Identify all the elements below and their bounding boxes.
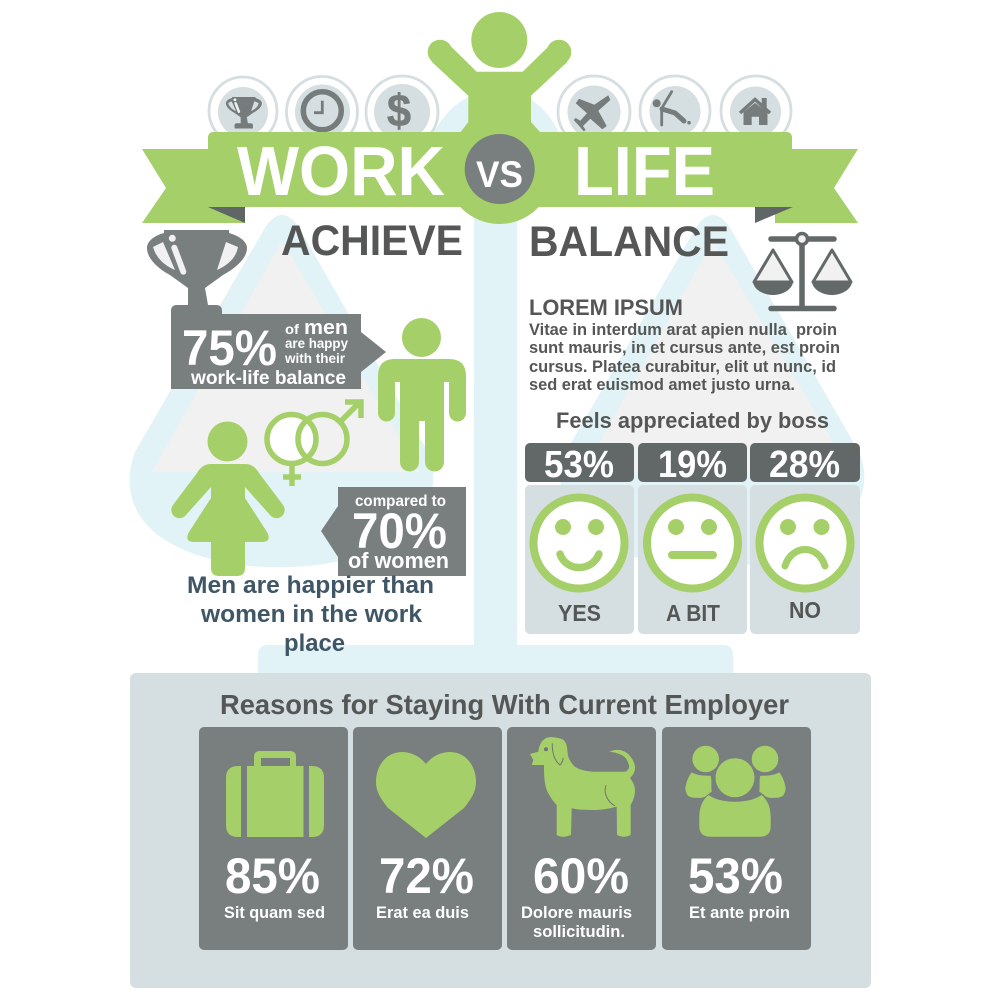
card: people 53%: [662, 727, 811, 950]
card: heart 72%: 72%: [379, 848, 474, 904]
panel: a bit: A BIT: [666, 600, 720, 626]
card: dog 60%: [507, 727, 656, 950]
figure with raised arms: [428, 12, 571, 224]
card: briefcase 85%: 85%: [225, 848, 320, 904]
text: men are happier: [187, 572, 434, 657]
heading: feels appreciated by boss: Feels appreciated by boss: [556, 408, 829, 433]
icon: trophy badge: [209, 77, 277, 145]
text: men are happier: Men are happier than: [187, 572, 434, 599]
callout: 75% of men: work-life balance: [190, 368, 346, 389]
icon: clock badge: [286, 76, 358, 148]
text block: lorem ipsum: LOREM IPSUM: [529, 295, 683, 320]
text block: lorem ipsum: cursus. Platea curabitur, elit ut nunc, id: [529, 358, 836, 376]
icon: dollar badge: [366, 76, 438, 148]
icon: gender symbols: [267, 402, 361, 486]
card: dog 60%: sollicitudin.: [533, 923, 625, 941]
callout: 70% of women: of women: [348, 548, 449, 573]
icon: large trophy: [147, 230, 247, 320]
icon: house badge: [721, 76, 791, 146]
icon row: work and life badges: [209, 76, 791, 148]
heading: reasons: Reasons for Staying With Current Employer: [220, 689, 789, 720]
icon: balance scales: [753, 234, 852, 308]
card: briefcase 85%: [199, 727, 348, 950]
card: dog 60%: Dolore mauris: [521, 904, 632, 922]
heading: achieve: ACHIEVE: [281, 217, 463, 265]
icon: stretching person badge: [640, 76, 710, 146]
card: dog 60%: 60%: [533, 848, 629, 904]
ribbon main band: [208, 132, 792, 207]
panel: no: NO: [789, 597, 821, 623]
ribbon fold right: [755, 207, 793, 223]
panel: yes: YES: [558, 600, 601, 626]
text: men are happier: women in the work: [200, 601, 422, 628]
callout: 70% of women: compared to: [355, 493, 446, 510]
card: briefcase 85%: Sit quam sed: [224, 904, 325, 922]
callout: 75% of men: 75%: [182, 320, 277, 376]
title: work: WORK: [237, 132, 445, 210]
card: heart 72%: [353, 727, 502, 950]
icon: airplane badge: [558, 76, 630, 148]
panel: yes: 53%: [544, 444, 614, 486]
panel: no: 28%: [769, 444, 840, 486]
banner: ribbon with figure: [142, 12, 858, 224]
vs badge: VS: [476, 154, 523, 195]
title: life: LIFE: [574, 132, 715, 210]
card: people 53%: Et ante proin: [689, 904, 790, 922]
text block: lorem ipsum: sunt mauris, in et cursus ante, est proin: [529, 339, 840, 357]
background: balance scale silhouette: [129, 90, 864, 680]
text block: lorem ipsum: Vitae in interdum arat apien nulla proin: [529, 321, 837, 339]
heading: balance: BALANCE: [529, 218, 729, 266]
icon: dollar badge: $: [387, 85, 411, 136]
callout: 75% of men: of: [285, 321, 299, 337]
vs badge: [465, 134, 535, 204]
panel: reasons for staying: [130, 673, 871, 988]
text block: lorem ipsum: [529, 295, 840, 394]
panel: yes: [525, 443, 634, 634]
callout: 75% of men: men: [304, 317, 348, 339]
callout: 75% of men: with their: [284, 350, 346, 366]
card: heart 72%: Erat ea duis: [376, 904, 469, 922]
icon: man: [378, 318, 466, 472]
text block: lorem ipsum: sed erat euismod amet justo urna.: [529, 376, 795, 394]
callout: 75% of men: are happy: [285, 335, 348, 351]
icon: woman: [171, 422, 285, 576]
callout: 70% of women: [321, 487, 466, 576]
callout: 75% of men: [171, 314, 386, 389]
ribbon tails: [142, 149, 225, 223]
panel: no: [750, 443, 860, 634]
panel: a bit: 19%: [658, 444, 727, 486]
ribbon fold left: [208, 207, 245, 223]
text: men are happier: place: [284, 630, 345, 657]
panel: a bit: [638, 443, 747, 634]
callout: 70% of women: 70%: [352, 503, 447, 559]
card: people 53%: 53%: [688, 848, 783, 904]
